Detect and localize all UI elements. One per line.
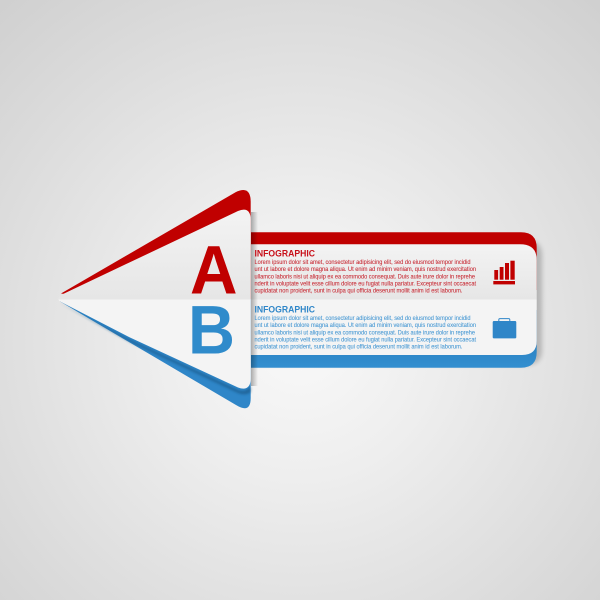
heading B: INFOGRAPHIC bbox=[254, 304, 315, 314]
text block B: unt ut labore et dolore magna aliqua. Ut enim ad minim veniam, quis nostrud exercitation bbox=[254, 322, 476, 329]
text block A bbox=[254, 259, 476, 295]
text block A: unt ut labore et dolore magna aliqua. Ut enim ad minim veniam, quis nostrud exercitation bbox=[254, 266, 476, 273]
text block B: ullamco laboris nisi ut aliquip ex ea commodo consequat. Duis aute irure dolor in reprehe bbox=[254, 329, 475, 336]
red back wing bbox=[61, 190, 251, 299]
ribbon: right panel with coloured backing bbox=[251, 232, 542, 368]
text block A: nderit in voluptate velit esse cillum dolore eu fugiat nulla pariatur. Excepteur sint occaecat bbox=[254, 280, 476, 288]
blue backing band bbox=[251, 310, 537, 368]
blue wing shadow bbox=[60, 303, 251, 394]
arrow: back wings and front face bbox=[58, 190, 251, 408]
text block B bbox=[254, 315, 476, 351]
panel soft shadow bbox=[251, 240, 542, 365]
icon: bar chart bbox=[493, 261, 515, 284]
blue back wing bbox=[60, 299, 251, 408]
text block A: Lorem ipsum dolor sit amet, consectetur adipisicing elit, sed do eiusmod tempor incidid bbox=[254, 259, 471, 266]
panel upper half A bbox=[251, 244, 537, 300]
heading A: INFOGRAPHIC bbox=[254, 248, 315, 258]
arrow front upper half bbox=[58, 210, 251, 300]
arrow shadow on panel bbox=[251, 212, 258, 386]
arrow front lower half bbox=[58, 300, 251, 389]
text block A: cupidatat non proident, sunt in culpa qui officia deserunt mollit anim id est laborum. bbox=[254, 288, 463, 295]
icon: briefcase bbox=[493, 319, 516, 338]
text block B: nderit in voluptate velit esse cillum dolore eu fugiat nulla pariatur. Excepteur sint occaecat bbox=[254, 336, 476, 344]
panel lower half B bbox=[251, 300, 537, 355]
text block B: cupidatat non proident, sunt in culpa qui officia deserunt mollit anim id est laborum. bbox=[254, 344, 463, 351]
letter B: B bbox=[188, 292, 235, 368]
text block A: ullamco laboris nisi ut aliquip ex ea commodo consequat. Duis aute irure dolor in reprehe bbox=[254, 273, 475, 280]
letter A: A bbox=[190, 232, 238, 308]
text block B: Lorem ipsum dolor sit amet, consectetur adipisicing elit, sed do eiusmod tempor incidid bbox=[254, 315, 471, 322]
red backing band bbox=[251, 232, 537, 290]
